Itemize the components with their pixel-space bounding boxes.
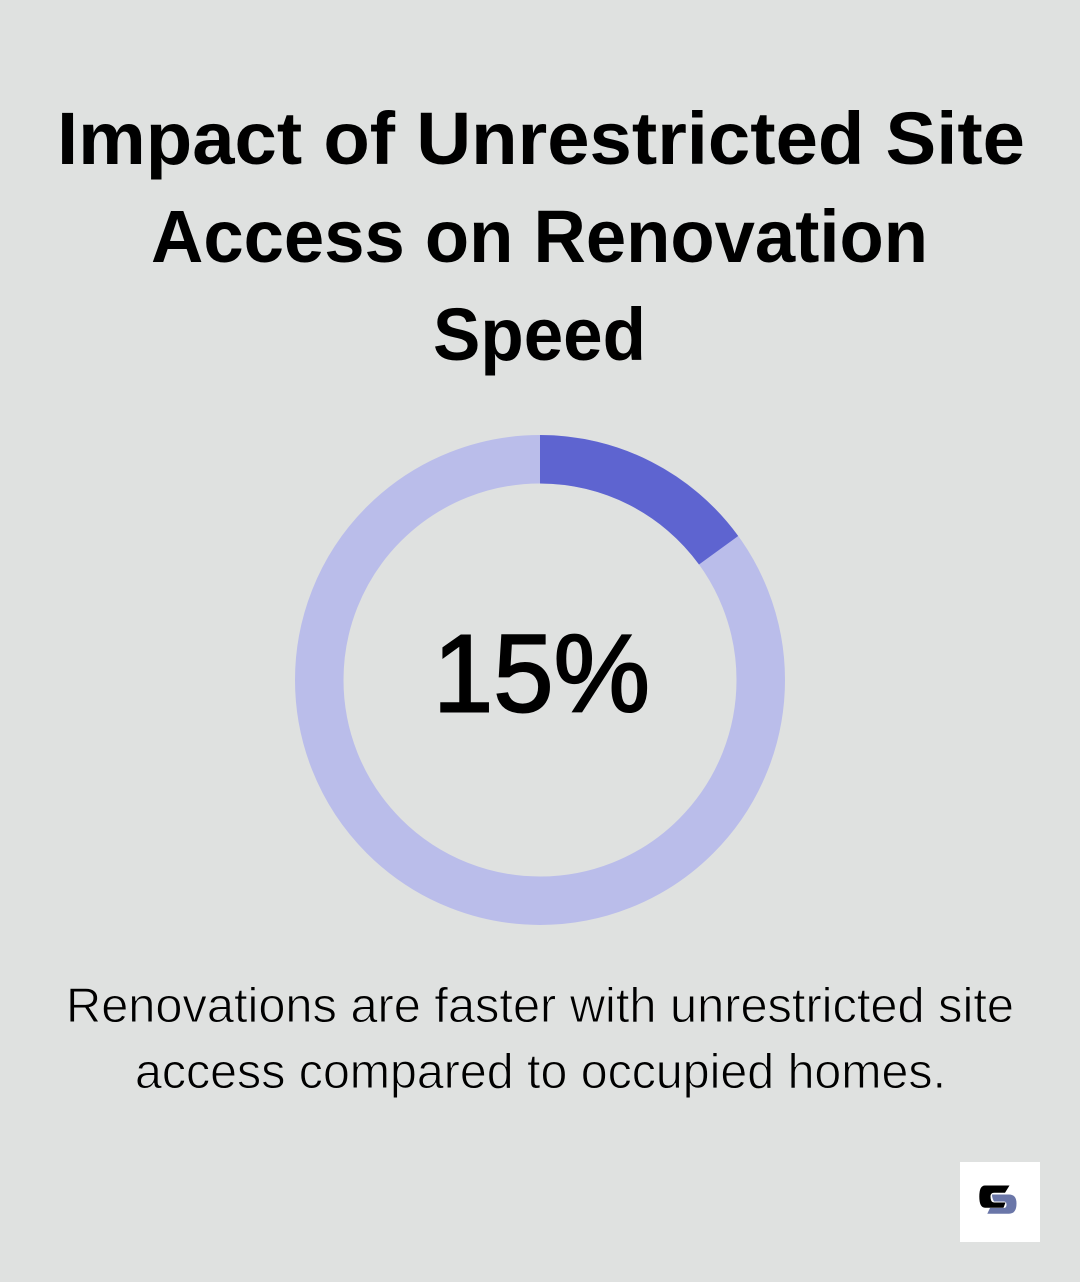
logo mark: blue lower stroke bbox=[987, 1194, 1016, 1214]
title bbox=[57, 97, 1025, 376]
chart segment: 15% bbox=[540, 435, 738, 564]
logo mark: black upper stroke bbox=[979, 1186, 1010, 1208]
center value: 15%: 15% bbox=[433, 612, 650, 736]
title: Speed bbox=[433, 293, 646, 376]
description text: access compared to occupied homes. bbox=[135, 1045, 946, 1099]
logo badge bbox=[960, 1162, 1040, 1242]
description text bbox=[66, 979, 1014, 1099]
description text: Renovations are faster with unrestricted site bbox=[66, 979, 1014, 1033]
donut chart bbox=[319, 435, 761, 901]
title: Access on Renovation bbox=[151, 195, 928, 278]
title: Impact of Unrestricted Site bbox=[57, 97, 1025, 180]
chart track: remaining 85% bbox=[319, 459, 761, 901]
